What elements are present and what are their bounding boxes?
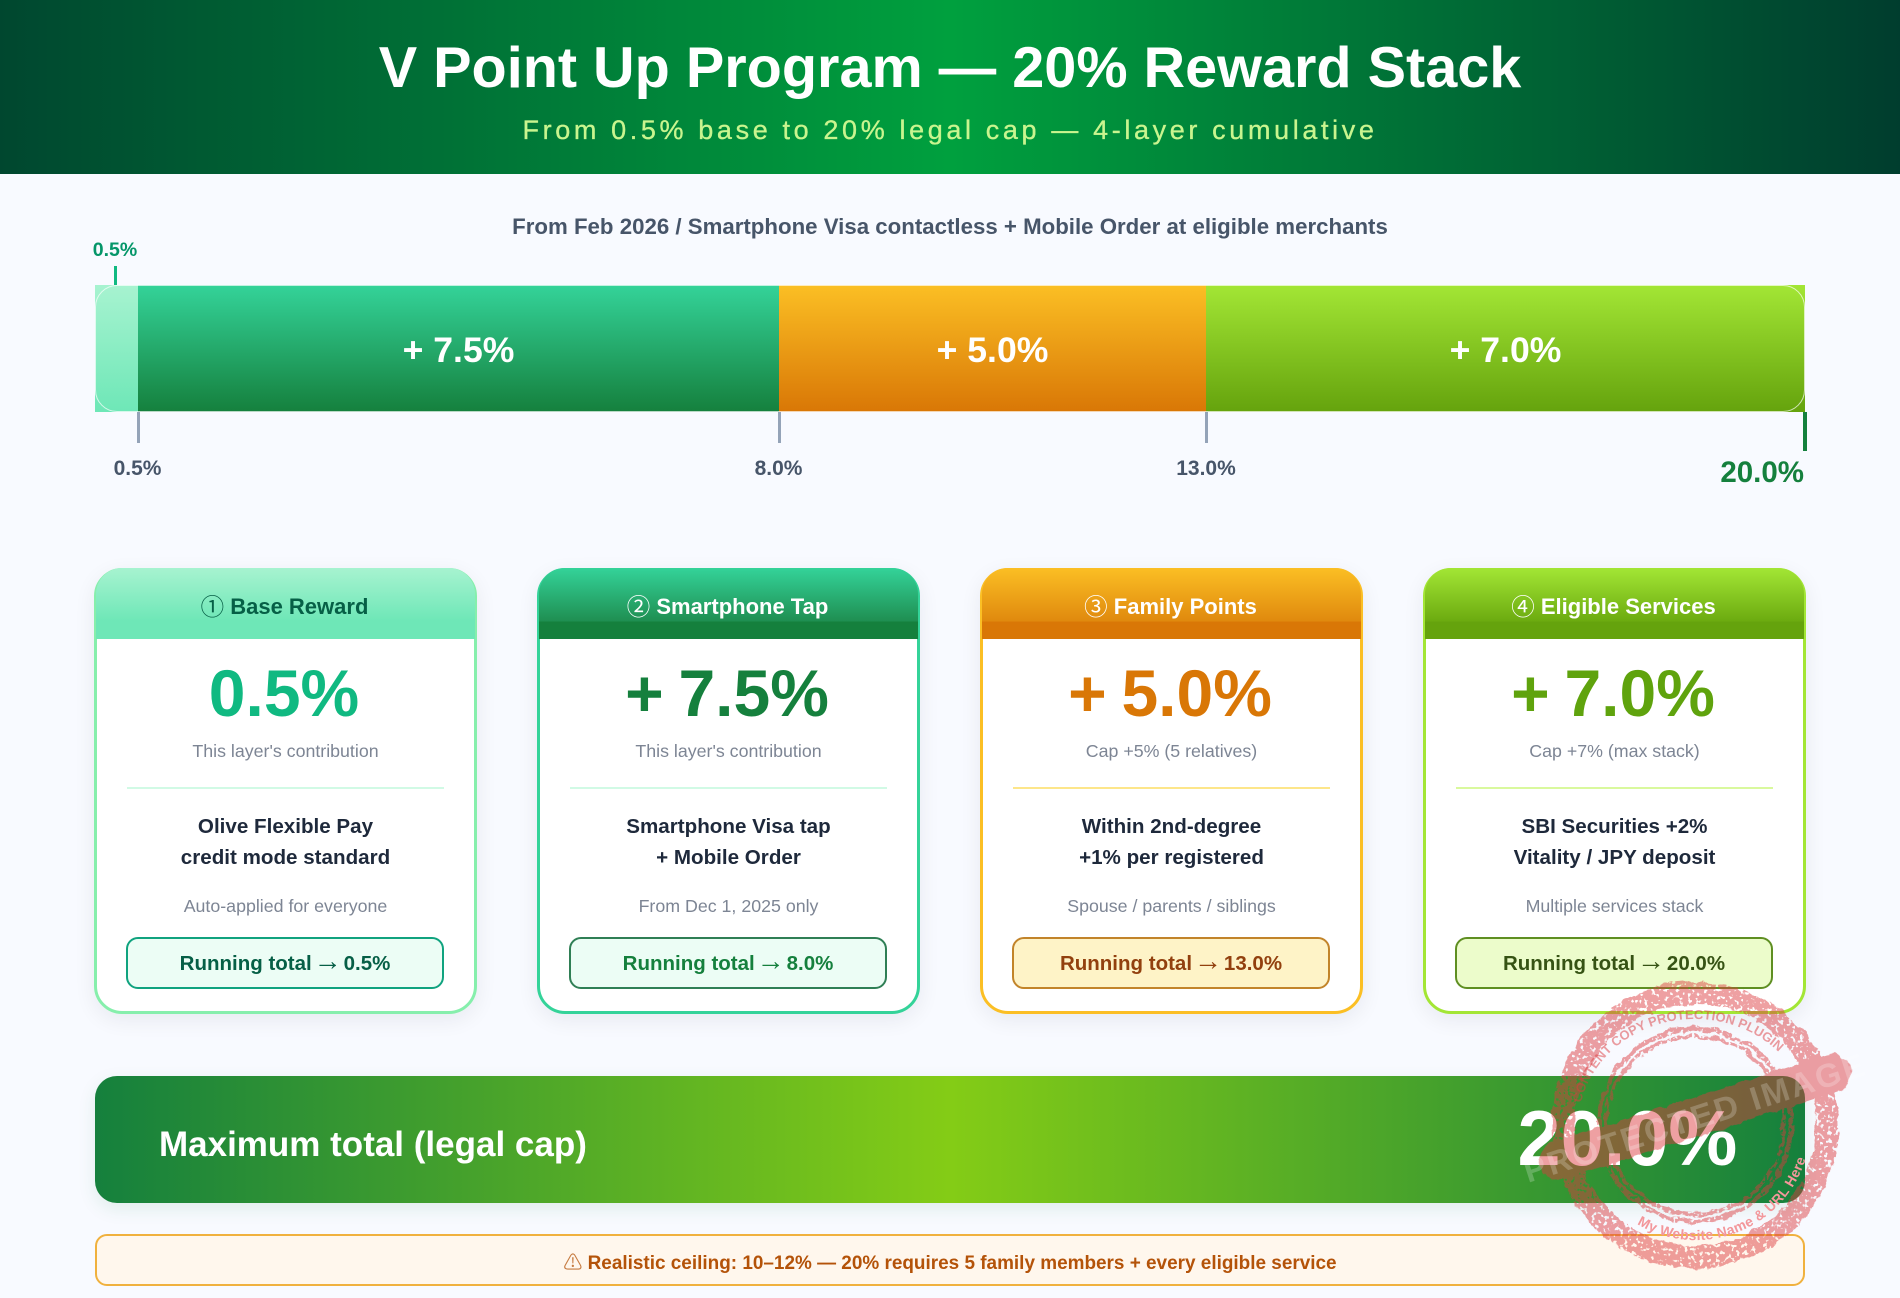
label: 0.5%: 0.5% (114, 457, 161, 480)
card 2 description: Smartphone Visa tap (626, 814, 831, 838)
tick: 0.5% (136, 412, 140, 443)
card 1 description: credit mode standard (181, 846, 390, 869)
card 4 description: Vitality / JPY deposit (1514, 846, 1715, 869)
stamp bottom text: My Website Name & URL Here (1638, 1158, 1805, 1240)
card 4 description (1514, 814, 1716, 869)
card 4 running total: Running total → 20.0% (1503, 944, 1725, 976)
card 4 running total (1455, 937, 1773, 989)
card 4 note: Multiple services stack (1526, 896, 1703, 916)
card 2 header (539, 568, 918, 639)
tick: 20.0% (1803, 412, 1807, 451)
tick: 8.0% (778, 412, 780, 443)
card 1 running total (126, 937, 444, 989)
segment: + 7.0%: + 7.0% (1450, 330, 1561, 370)
warning callout: ⚠ Realistic ceiling: 10–12% — 20% requires 5 family members + every eligible service (563, 1253, 1337, 1274)
card 1 description: Olive Flexible Pay (198, 814, 373, 838)
card 4 caption: Cap +7% (max stack) (1529, 741, 1700, 761)
card 3: family points (980, 568, 1363, 1014)
card 3 running total: Running total → 13.0% (1060, 944, 1282, 976)
card 1 header: ① Base Reward (201, 594, 368, 620)
card 1 value: 0.5% (209, 656, 359, 730)
card 1 caption: This layer's contribution (192, 741, 379, 761)
card 3 description: +1% per registered (1079, 846, 1264, 869)
stamp top text: CONTENT COPY PROTECTION PLUGIN (1573, 1010, 1784, 1102)
card 1 header (96, 568, 475, 639)
card 4 header (1425, 568, 1804, 639)
segment: + 5.0%: + 5.0% (937, 330, 1048, 370)
card 2 running total (569, 937, 887, 989)
card 4: eligible services (1423, 568, 1806, 1014)
warning callout (95, 1234, 1805, 1286)
card 2 caption: This layer's contribution (635, 741, 822, 761)
card 2 note: From Dec 1, 2025 only (639, 896, 818, 916)
card 2: smartphone tap (537, 568, 920, 1014)
segment: + 5.0% (779, 285, 1206, 412)
banner text: PROTECTED IMAGE (1519, 1045, 1871, 1190)
tick: 13.0% (1205, 412, 1208, 443)
segment: + 7.5% (138, 285, 779, 412)
card 4 header: ④ Eligible Services (1511, 594, 1716, 620)
card 3 header: ③ Family Points (1084, 594, 1257, 620)
label: 8.0%: 8.0% (755, 457, 802, 480)
card 3 note: Spouse / parents / siblings (1067, 896, 1276, 916)
card 3 value: + 5.0% (1068, 656, 1272, 730)
total value: 20.0% (1518, 1096, 1737, 1182)
card 4 value: + 7.0% (1511, 656, 1715, 730)
subtitle: From 0.5% base to 20% legal cap — 4-layer cumulative (522, 115, 1378, 145)
header banner (0, 0, 1900, 174)
label: 13.0%: 13.0% (1176, 457, 1236, 480)
card 4 description: SBI Securities +2% (1521, 814, 1708, 838)
title: V Point Up Program — 20% Reward Stack (379, 36, 1521, 100)
card 3 description (1079, 814, 1264, 869)
base marker label: 0.5% (93, 239, 137, 261)
card 2 header: ② Smartphone Tap (627, 594, 828, 620)
segment: + 7.0% (1206, 285, 1805, 412)
segment: base 0.5% (95, 285, 138, 412)
stamp banner (1534, 1049, 1856, 1185)
card 1 note: Auto-applied for everyone (184, 896, 387, 916)
card 2 description: + Mobile Order (656, 846, 801, 869)
card 3 description: Within 2nd-degree (1082, 814, 1261, 838)
card 2 running total: Running total → 8.0% (623, 944, 833, 976)
chart heading: From Feb 2026 / Smartphone Visa contactless + Mobile Order at eligible merchants (512, 214, 1388, 239)
card 1 description (181, 814, 390, 869)
bar segments (95, 285, 1805, 412)
card 1: base reward (94, 568, 477, 1014)
stamp shapes (1534, 993, 1856, 1257)
stacked bar chart (93, 239, 1807, 489)
card 1 running total: Running total → 0.5% (180, 944, 390, 976)
maximum total bar (95, 1076, 1805, 1203)
card 2 value: + 7.5% (625, 656, 829, 730)
segment: + 7.5%: + 7.5% (403, 330, 514, 370)
stamp rings (1563, 993, 1827, 1257)
card 3 running total (1012, 937, 1330, 989)
card 3 caption: Cap +5% (5 relatives) (1086, 741, 1257, 761)
total label: Maximum total (legal cap) (159, 1125, 587, 1164)
label: 20.0%: 20.0% (1720, 456, 1804, 489)
base marker tick (114, 266, 117, 285)
card 2 description (626, 814, 831, 869)
card 3 header (982, 568, 1361, 639)
